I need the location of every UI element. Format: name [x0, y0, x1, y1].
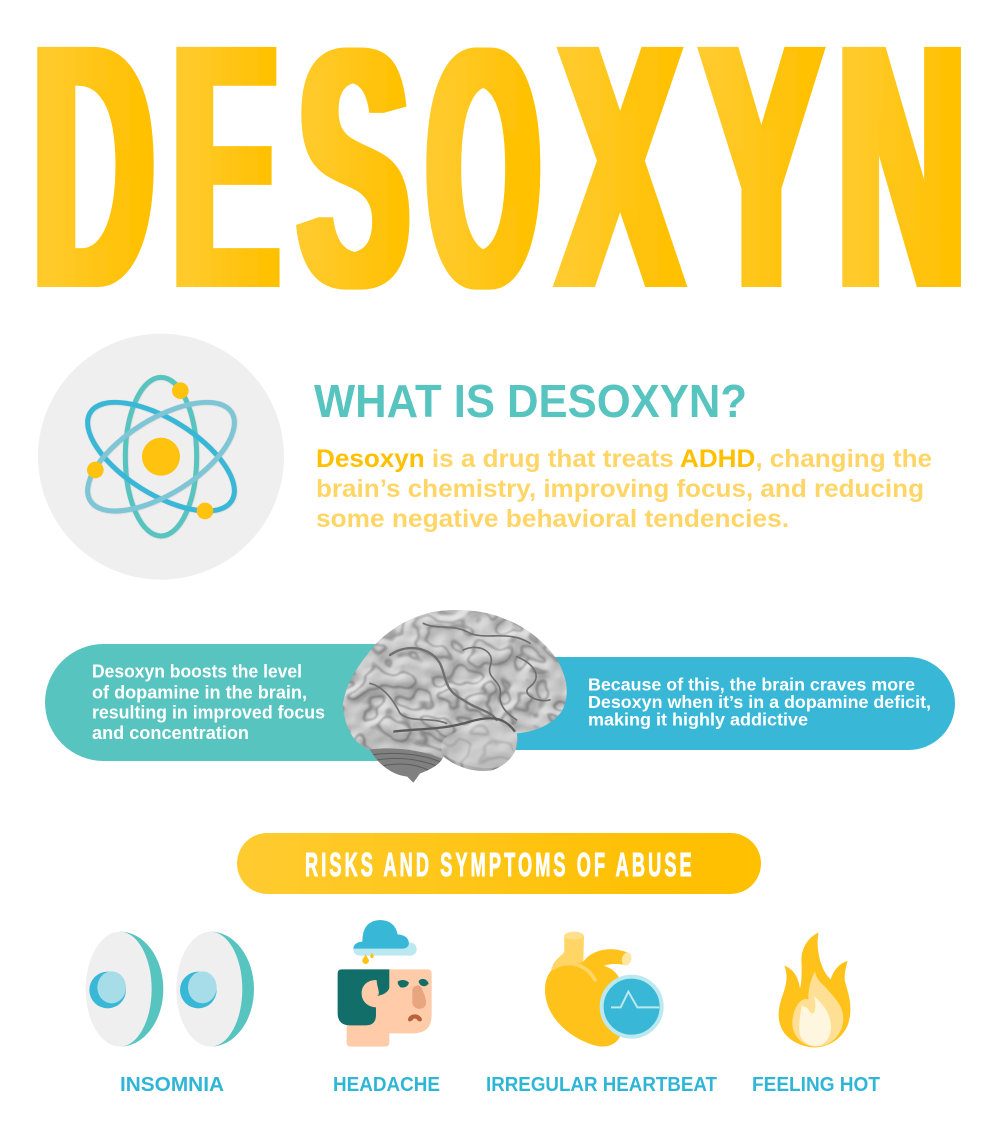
banner: risks and symptoms	[237, 833, 761, 894]
icon: eyes	[86, 932, 254, 1047]
title	[33, 0, 966, 362]
panel: addiction pill: making it highly addictive	[588, 710, 808, 730]
label: irregular heartbeat: IRREGULAR HEARTBEAT	[486, 1074, 717, 1096]
text block: definition: brain’s chemistry, improving focus, and reducing	[316, 475, 924, 503]
image: brain	[342, 610, 567, 783]
text block: definition: Desoxyn is a drug that treats ADHD, changing the	[316, 445, 932, 473]
panel: dopamine boost pill: and concentration	[92, 723, 249, 743]
icon: atom	[38, 334, 284, 580]
panel: addiction pill	[470, 657, 955, 750]
icon: headache	[338, 920, 432, 1047]
panel: dopamine boost pill: Desoxyn boosts the level	[92, 662, 302, 682]
text block: definition	[316, 445, 932, 533]
panel: dopamine boost pill: of dopamine in the brain,	[92, 682, 307, 702]
banner: risks and symptoms: RISKS AND SYMPTOMS OF ABUSE	[305, 846, 692, 883]
label: insomnia: INSOMNIA	[120, 1074, 224, 1096]
text block: definition: some negative behavioral tendencies.	[316, 505, 789, 533]
label: headache: HEADACHE	[333, 1074, 440, 1096]
panel: dopamine boost pill	[45, 644, 445, 761]
icon: flame	[779, 932, 850, 1047]
panel: dopamine boost pill: resulting in improved focus	[92, 702, 325, 722]
heading: what is desoxyn: WHAT IS DESOXYN?	[314, 375, 747, 427]
panel: addiction pill: Because of this, the brain craves more	[588, 674, 915, 694]
panel: addiction pill: Desoxyn when it’s in a dopamine deficit,	[588, 692, 931, 712]
icon: irregular heartbeat	[545, 932, 662, 1047]
label: feeling hot: FEELING HOT	[752, 1074, 880, 1096]
